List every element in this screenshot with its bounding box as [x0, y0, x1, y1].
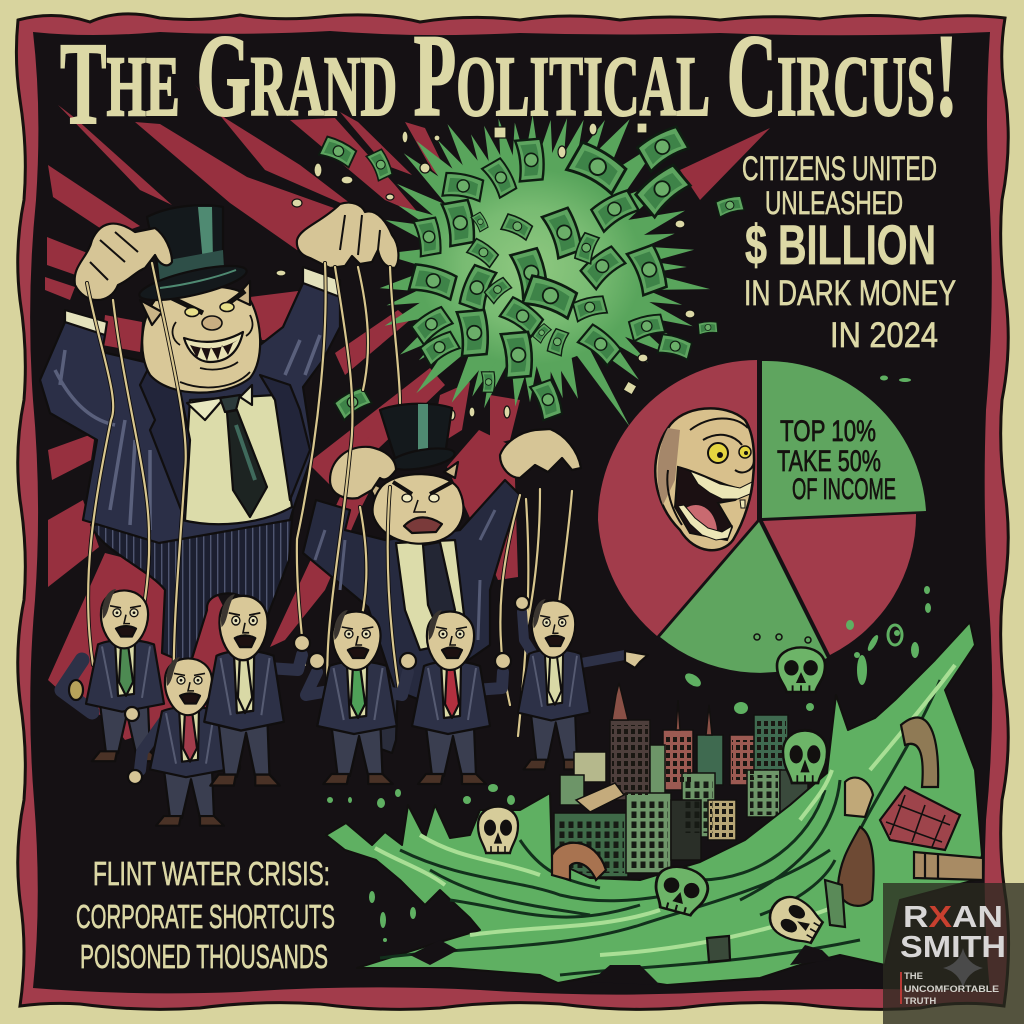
citizens united callout: IN DARK MONEY — [744, 274, 956, 313]
bricks — [880, 787, 960, 850]
spires — [612, 683, 712, 735]
right hand — [297, 203, 398, 268]
windows — [558, 775, 778, 873]
money explosion — [276, 109, 744, 430]
cup — [825, 880, 845, 927]
slice: bottom green — [660, 522, 827, 673]
elbow pipe — [552, 843, 606, 880]
splash droplets — [327, 376, 931, 942]
pie label: OF INCOME — [792, 473, 896, 506]
bubbles over pie — [754, 634, 811, 643]
head — [373, 474, 463, 544]
top hat — [380, 404, 456, 474]
lapels — [140, 365, 310, 520]
logo name — [900, 899, 1006, 964]
slice: left red — [598, 360, 757, 636]
citizens united callout — [742, 150, 956, 355]
side pipe — [914, 852, 983, 880]
suit jacket — [40, 283, 340, 543]
skulls — [478, 647, 827, 950]
rear leg — [368, 670, 398, 753]
title: GRAND POLITICAL CIRCUS! — [196, 10, 1024, 141]
right hand — [500, 429, 581, 478]
pie chart — [598, 360, 926, 673]
jacket — [303, 480, 520, 700]
title: T — [60, 18, 106, 149]
ears — [366, 462, 458, 500]
flying coins and debris — [276, 123, 695, 420]
politician 5 — [412, 610, 511, 784]
flint water crisis caption — [76, 855, 335, 975]
flood highlights — [375, 665, 955, 955]
citizens united callout: UNLEASHED — [765, 185, 903, 221]
watermark panel — [883, 883, 1024, 1024]
burst core — [418, 169, 642, 365]
logo name: RXAN — [903, 899, 1003, 934]
flood body — [326, 622, 982, 985]
citizens united callout: $ BILLION — [745, 213, 936, 276]
dark bites along the bottom edge — [410, 940, 832, 985]
watermark: Ryan Smith logo — [883, 883, 1024, 1024]
top hat — [137, 205, 249, 307]
left hand — [75, 224, 172, 300]
shading — [315, 510, 495, 640]
tall pipe — [901, 718, 938, 787]
left hand — [330, 447, 396, 498]
cuffs — [65, 267, 340, 335]
dollar bills — [319, 124, 744, 421]
face — [172, 291, 253, 387]
flint water crisis caption: FLINT WATER CRISIS: — [93, 855, 330, 892]
crimson sunburst rays — [45, 85, 770, 740]
star mark — [943, 948, 983, 988]
ruined city — [554, 683, 808, 877]
pie label — [777, 415, 896, 506]
title: HE — [106, 38, 180, 134]
collar — [187, 385, 252, 420]
flood swirls — [380, 680, 940, 975]
big tycoon puppeteer — [40, 203, 398, 665]
politician 3 — [204, 594, 310, 786]
tagline — [904, 971, 999, 1007]
tagline: THE — [904, 971, 923, 982]
screaming face — [655, 408, 754, 550]
red rule — [900, 972, 902, 1004]
politician 1 — [62, 589, 164, 761]
tagline: UNCOMFORTABLE — [904, 984, 999, 995]
pie label: TOP 10% — [780, 415, 876, 448]
face — [393, 482, 452, 533]
marionette politicians — [62, 589, 648, 826]
distant buildings — [610, 715, 788, 800]
jacket shading — [55, 335, 320, 530]
slice: top green — [762, 361, 926, 518]
slice: right red — [763, 514, 916, 655]
tie — [220, 395, 267, 517]
valve — [845, 778, 873, 817]
fat head — [142, 287, 260, 393]
shirt — [396, 540, 467, 650]
near buildings — [560, 752, 780, 837]
tie — [423, 542, 455, 635]
politician 2 — [128, 657, 240, 826]
shirt — [182, 395, 292, 524]
flint water crisis caption: CORPORATE SHORTCUTS — [76, 898, 335, 935]
burst spikes — [377, 109, 712, 430]
ears — [140, 281, 250, 325]
flint water crisis caption: POISONED THOUSANDS — [80, 938, 328, 975]
pipes and debris — [552, 718, 983, 962]
politician 6 — [515, 596, 648, 769]
pie label: TAKE 50% — [777, 445, 881, 478]
barrel — [838, 827, 874, 906]
politician 4 — [306, 610, 416, 784]
citizens united callout: IN 2024 — [830, 316, 938, 355]
toxic green flood — [326, 376, 983, 985]
small tycoon puppeteer — [303, 404, 581, 753]
tilted roof — [576, 783, 624, 812]
logo name: SMITH — [900, 929, 1006, 964]
tagline: TRUTH — [904, 996, 936, 1007]
striped trousers — [91, 505, 293, 665]
can — [707, 936, 730, 962]
puppet strings — [87, 263, 572, 736]
